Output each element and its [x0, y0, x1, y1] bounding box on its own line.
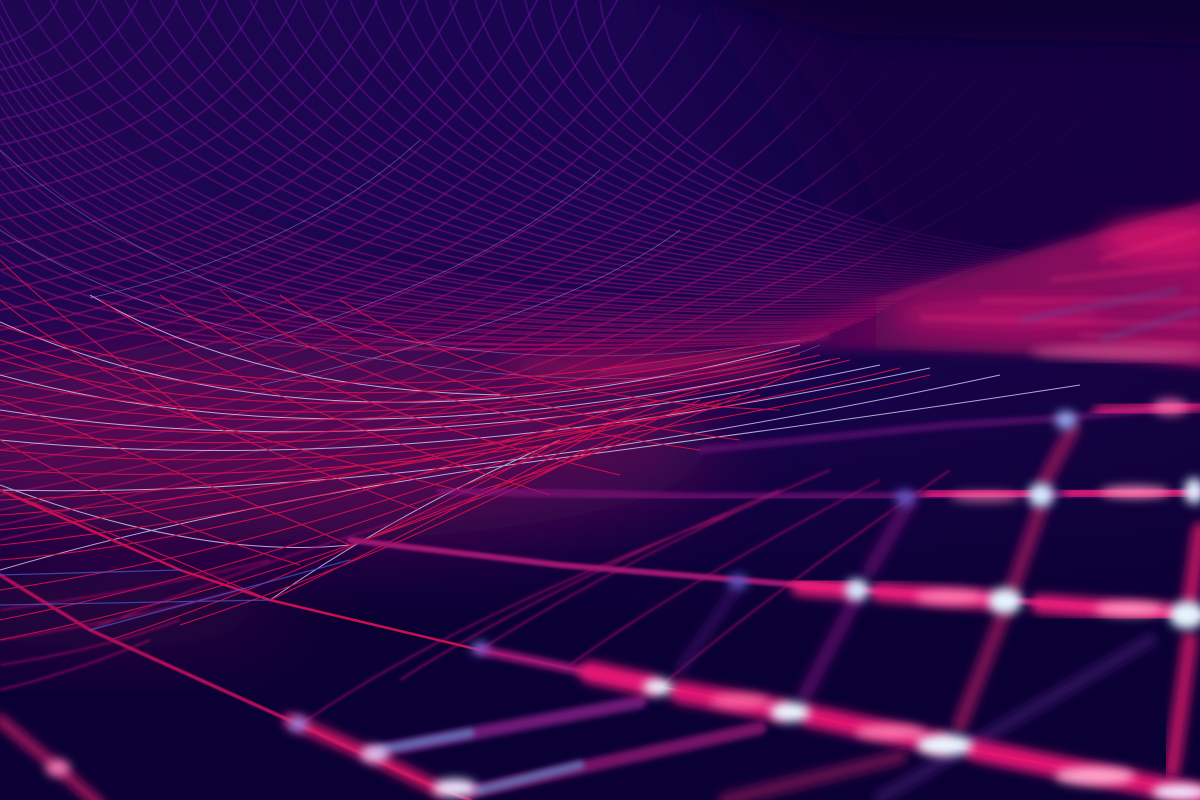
- glowing nodes: [46, 399, 1200, 800]
- pink fold band: [600, 200, 1200, 372]
- bright foreground grid: cross members: [368, 430, 1200, 800]
- upper mesh: down-right curve family: [0, 0, 1020, 350]
- upper mesh: lighter accent lines: [0, 140, 820, 385]
- central mesh: red-pink lines: [0, 260, 930, 640]
- central mesh: white contour lines: [0, 295, 1080, 600]
- upper mesh: down-left curve family: [0, 0, 1100, 540]
- lower left mesh: dim pink fan: [0, 470, 950, 725]
- right side fade over mesh: [590, 0, 1200, 270]
- bright foreground grid: main pink beams: [0, 405, 1200, 800]
- fold throat glow: [500, 349, 800, 381]
